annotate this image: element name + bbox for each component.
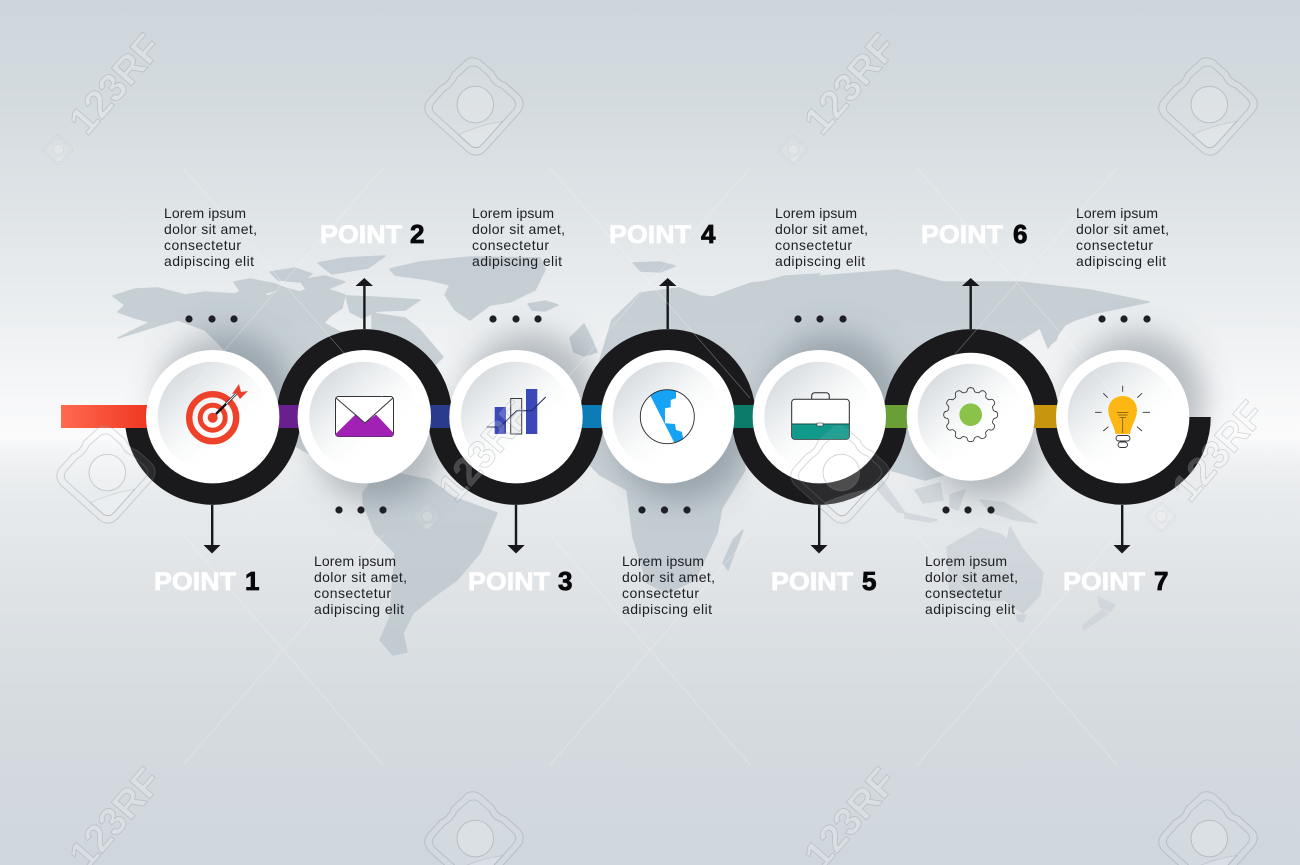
text block 2: [314, 553, 407, 617]
text block 1: dolor sit amet,: [164, 221, 257, 237]
icon: briefcase: [792, 393, 849, 439]
watermark overlay: 123RF: [430, 393, 540, 510]
text block 6: consectetur: [925, 585, 1002, 601]
label: point 2: [320, 219, 424, 249]
world map: [113, 256, 1149, 655]
segment green: [881, 405, 911, 428]
arrow down: point 7: [1114, 505, 1130, 554]
label: point 5: POINT: [771, 568, 853, 596]
text block 6: dolor sit amet,: [925, 569, 1018, 585]
icon: target with dart: [189, 384, 248, 441]
text block 5: [775, 205, 868, 269]
icon: globe: [640, 384, 694, 446]
label: point 1: 1: [245, 566, 259, 596]
text block 5: adipiscing elit: [775, 253, 865, 269]
label: point 4: [609, 219, 716, 249]
label: point 5: 5: [862, 566, 876, 596]
text block 7: [1076, 205, 1169, 269]
text block 7: consectetur: [1076, 237, 1153, 253]
arrow down: point 3: [507, 505, 525, 554]
text block 2: dolor sit amet,: [314, 569, 407, 585]
text block 2: Lorem ipsum: [314, 553, 396, 569]
label: point 6: 6: [1013, 219, 1027, 249]
text block 2: consectetur: [314, 585, 391, 601]
node 1: target: [146, 350, 279, 483]
text block 3: adipiscing elit: [472, 253, 562, 269]
arrow down: point 1: [204, 505, 220, 554]
label: point 2: 2: [410, 219, 424, 249]
icon: bar chart: [487, 389, 546, 434]
segment gold: [1030, 405, 1060, 428]
icon: gear: [944, 388, 998, 442]
text block 3: [472, 205, 565, 269]
label: point 1: POINT: [154, 568, 236, 596]
timeline ribbon: [61, 341, 1199, 493]
text block 1: adipiscing elit: [164, 253, 254, 269]
text block 7: dolor sit amet,: [1076, 221, 1169, 237]
node 7: light bulb: [1056, 350, 1189, 483]
arrows: [204, 278, 1130, 554]
dots: [185, 315, 1151, 514]
text block 4: Lorem ipsum: [622, 553, 704, 569]
text block 7: Lorem ipsum: [1076, 205, 1158, 221]
node 5: briefcase: [753, 350, 886, 483]
node 3: bar chart: [449, 350, 583, 483]
arrow up: point 4: [659, 278, 676, 329]
watermark overlay: 123RF: [61, 26, 171, 143]
label: point 6: POINT: [921, 221, 1003, 249]
segment navy: [427, 405, 455, 428]
icon: light bulb: [1095, 386, 1150, 448]
watermark overlay: 123RF: [1164, 393, 1274, 510]
segment purple: [275, 405, 303, 428]
segment teal: [730, 405, 758, 428]
label: point 7: 7: [1154, 566, 1168, 596]
node 6: gear: [907, 353, 1035, 481]
text block 4: adipiscing elit: [622, 601, 712, 617]
label: point 5: [771, 566, 876, 596]
label: point 6: [921, 219, 1027, 249]
label: point 1: [154, 566, 259, 596]
text block 4: dolor sit amet,: [622, 569, 715, 585]
label: point 7: POINT: [1063, 568, 1145, 596]
text block 1: [164, 205, 257, 269]
soft shadows: [158, 332, 1205, 502]
text block 3: dolor sit amet,: [472, 221, 565, 237]
label: point 3: 3: [558, 566, 572, 596]
arrow up: point 6: [962, 278, 980, 329]
text block 5: dolor sit amet,: [775, 221, 868, 237]
node 4: globe: [601, 350, 734, 483]
text block 1: Lorem ipsum: [164, 205, 246, 221]
text block 6: Lorem ipsum: [925, 553, 1007, 569]
serpentine track: [137, 341, 1199, 493]
text block 5: Lorem ipsum: [775, 205, 857, 221]
arrow down: point 5: [810, 505, 828, 554]
text block 6: adipiscing elit: [925, 601, 1015, 617]
text block 2: adipiscing elit: [314, 601, 404, 617]
watermark overlay: 123RF: [796, 26, 906, 143]
text block 1: consectetur: [164, 237, 241, 253]
label: point 4: POINT: [609, 221, 691, 249]
text block 5: consectetur: [775, 237, 852, 253]
text block 6: [925, 553, 1018, 617]
label: point 4: 4: [701, 219, 716, 249]
text block 3: Lorem ipsum: [472, 205, 554, 221]
start bar: [61, 405, 151, 428]
text block 4: [622, 553, 715, 617]
arrow up: point 2: [356, 278, 373, 329]
label: point 3: POINT: [468, 568, 550, 596]
text block 4: consectetur: [622, 585, 699, 601]
label: point 3: [468, 566, 572, 596]
text block 7: adipiscing elit: [1076, 253, 1166, 269]
icon: envelope: [336, 396, 394, 436]
node 2: envelope: [298, 350, 431, 483]
label: point 2: POINT: [320, 221, 402, 249]
segment blue: [578, 405, 606, 428]
text block 3: consectetur: [472, 237, 549, 253]
label: point 7: [1063, 566, 1168, 596]
